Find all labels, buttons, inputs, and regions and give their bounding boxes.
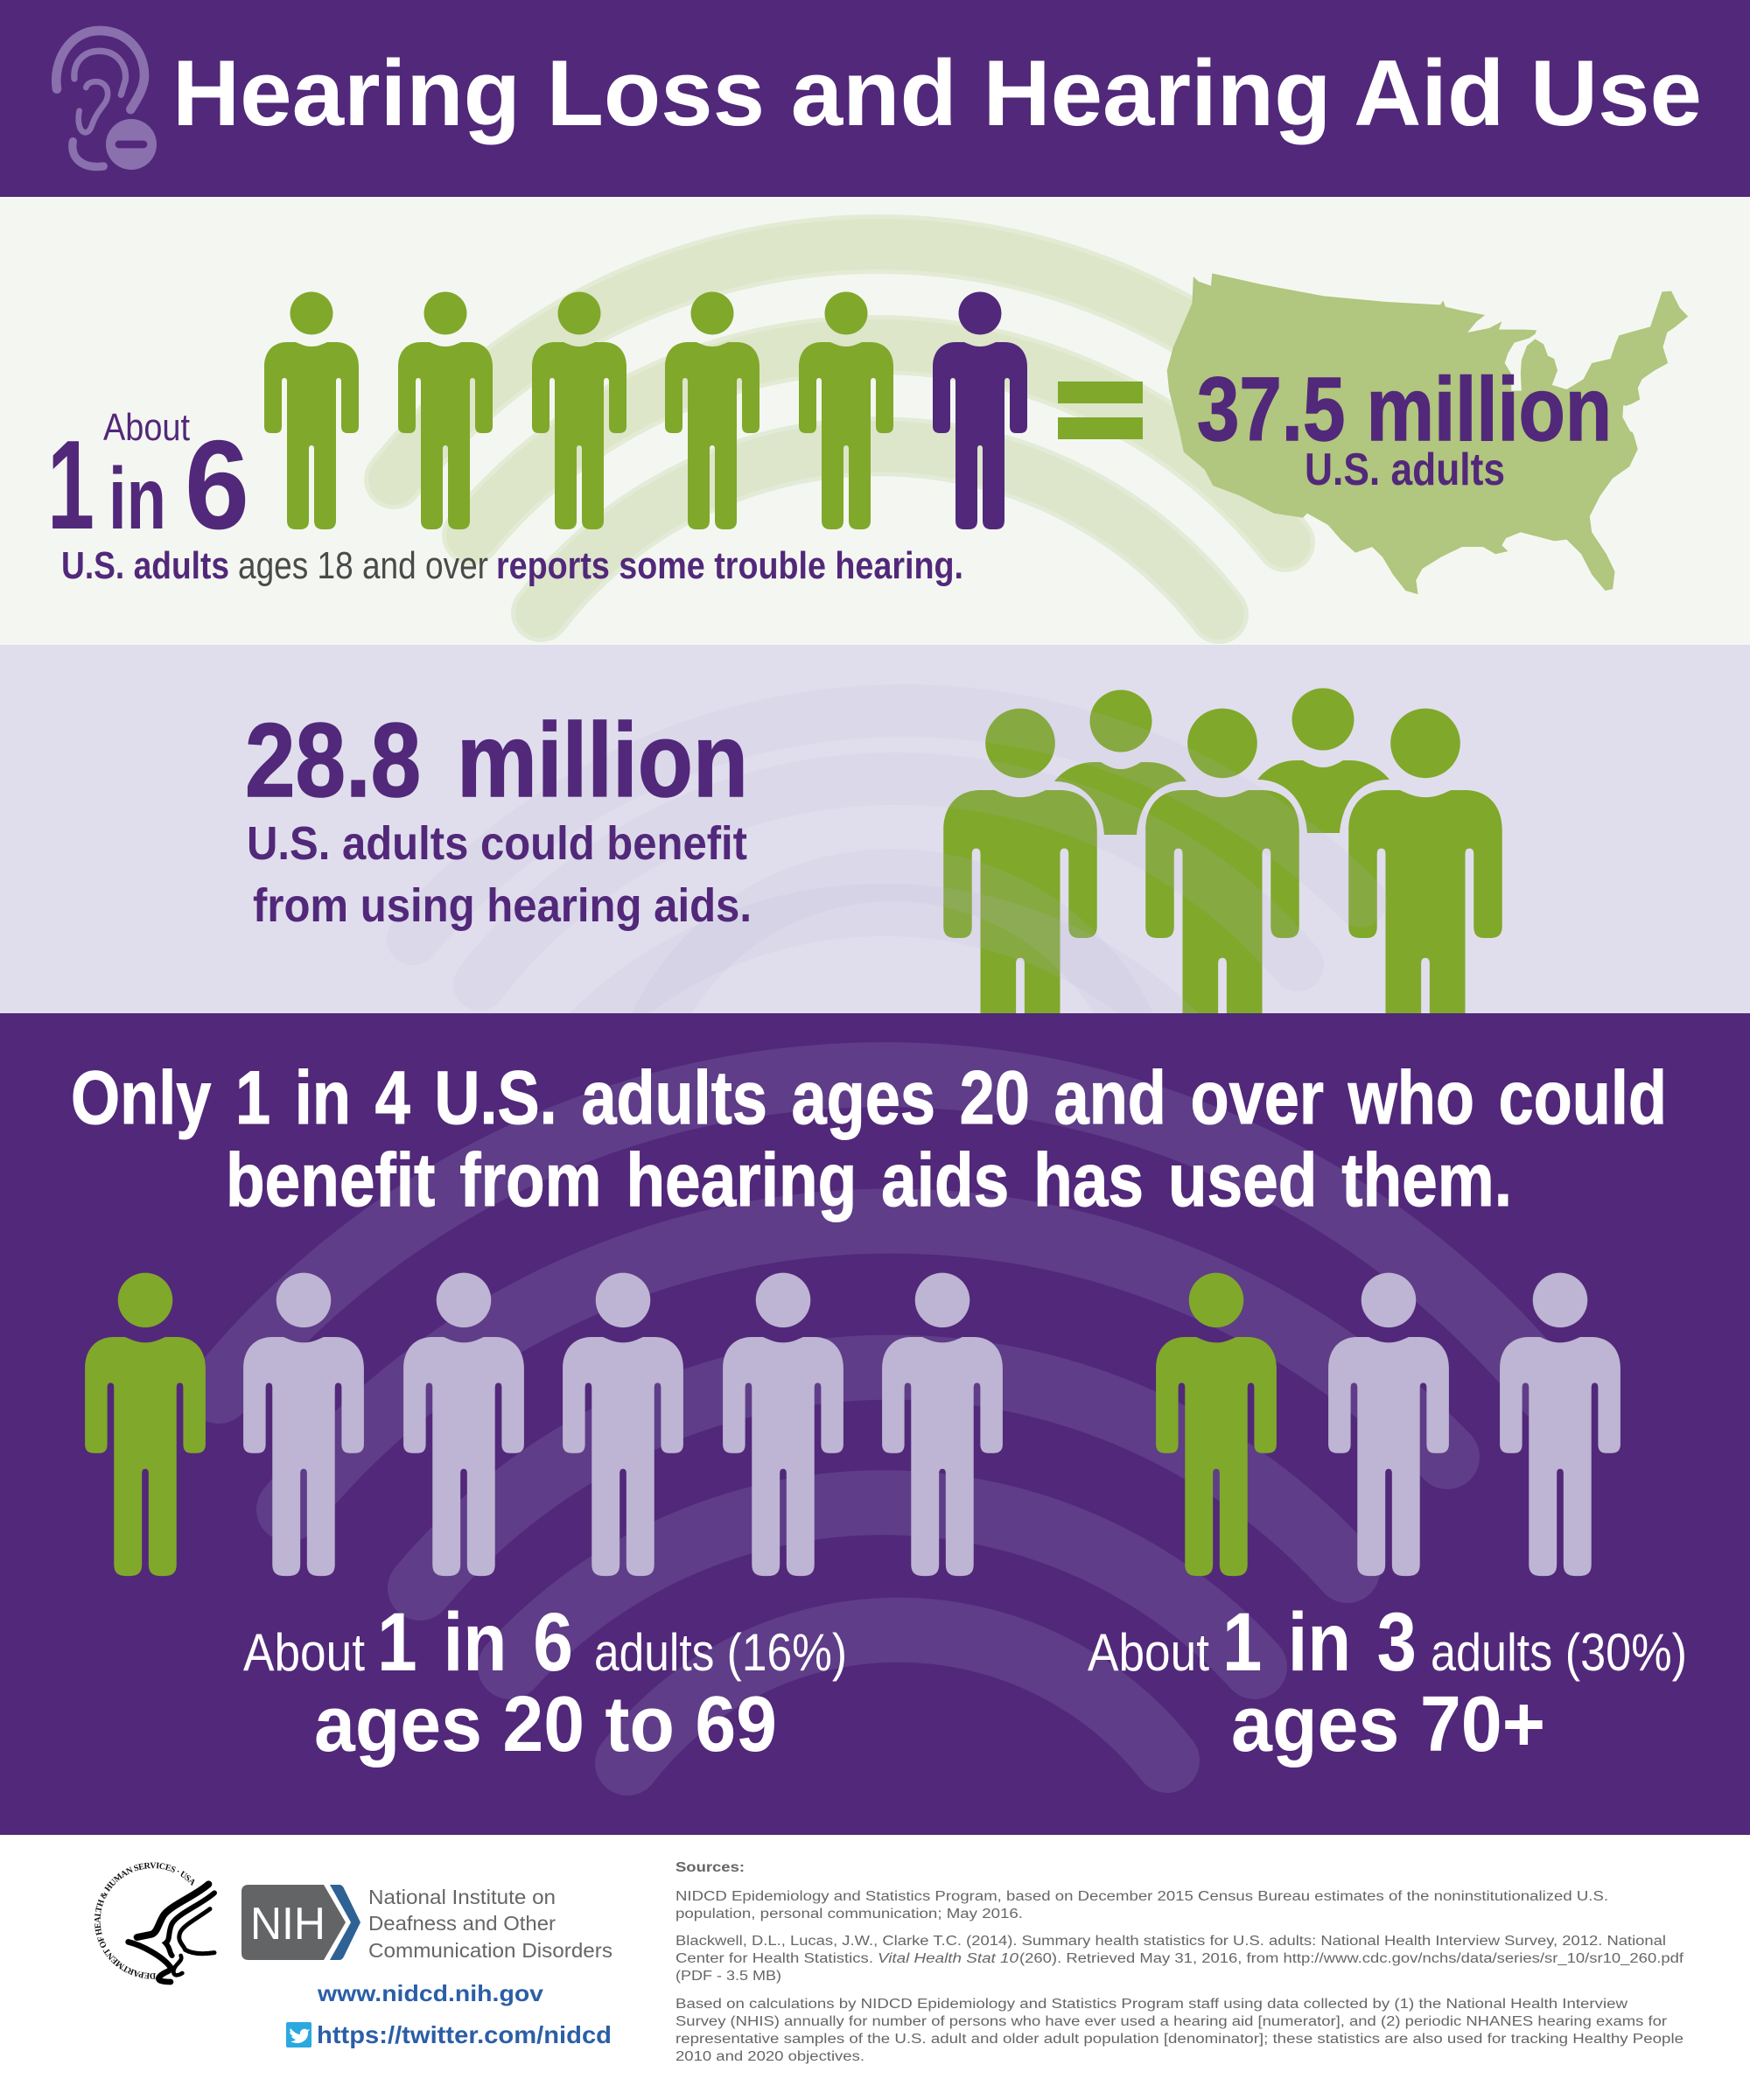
text: could benefit from hearing aids: U.S. adults could benefit	[247, 817, 747, 870]
figure row: five green and one purple person	[264, 292, 1027, 529]
caption: U.S. adults trouble hearing: ages 18 and over	[238, 544, 488, 587]
logo: NIH: NIH	[250, 1899, 326, 1950]
panel: 28.8 million	[0, 645, 1750, 1013]
title: Hearing Loss and Hearing Aid Use	[172, 40, 1702, 145]
twitter link: https://twitter.com/nidcd	[317, 2021, 612, 2048]
text: could benefit from hearing aids	[247, 817, 752, 932]
statistic: 28.8 million: 28.8 million	[245, 702, 748, 819]
sources text: Based on calculations by NIDCD Epidemiology and Statistics Program staff using data collected by (1) the National Health Interview	[676, 1997, 1628, 2012]
website link: www.nidcd.nih.gov	[317, 1980, 544, 2006]
group of five green figures	[943, 688, 1502, 1095]
sources text: (260). Retrieved May 31, 2016, from http://www.cdc.gov/nchs/data/series/sr_10/sr10_260.pdf	[1019, 1951, 1684, 1966]
text: institute name: Communication Disorders	[368, 1939, 612, 1962]
heading	[71, 1056, 1667, 1222]
heading: benefit from hearing aids has used them.	[226, 1138, 1512, 1222]
icon: equals sign	[1058, 382, 1143, 439]
panel: only 1 in 4	[0, 1013, 1750, 1835]
sources text: Sources:	[676, 1860, 745, 1875]
text: could benefit from hearing aids: from using hearing aids.	[253, 879, 752, 932]
sources text: 2010 and 2020 objectives.	[676, 2049, 864, 2064]
figure row: 1 in 3 adults	[1156, 1273, 1620, 1576]
statistic: about 1 in 6 ages 20 to 69: 1 in 6	[377, 1596, 573, 1689]
footer logos and links	[94, 1862, 612, 2048]
statistic: about 1 in 6	[47, 406, 249, 556]
statistic: about 1 in 3 ages 70+: adults (30%)	[1431, 1623, 1687, 1682]
sources text: representative samples of the U.S. adult and older adult population [denominator]; these statistics are also used for tracking Healthy People	[676, 2032, 1684, 2047]
sources text: Vital Health Stat 10	[878, 1951, 1018, 1966]
statistic: about 1 in 3 ages 70+: ages 70+	[1231, 1681, 1545, 1768]
statistic: about 1 in 6: 6	[185, 414, 249, 556]
statistic: about 1 in 3 ages 70+: 1 in 3	[1222, 1596, 1417, 1689]
statistic: about 1 in 6 ages 20 to 69	[243, 1596, 847, 1768]
logo: NIH	[242, 1885, 360, 1960]
statistic: about 1 in 6: About	[103, 406, 190, 449]
panel: 1 in 6 adults	[0, 197, 1750, 645]
sources text: Survey (NHIS) annually for number of persons who have ever used a hearing aid [numerator], and (2) periodic NHANES hearing exams for	[676, 2014, 1667, 2029]
statistic: about 1 in 6 ages 20 to 69: About	[243, 1623, 365, 1682]
figure row: 1 in 6 adults	[85, 1273, 1003, 1576]
text: institute name: National Institute on	[368, 1886, 556, 1908]
background sound arcs	[632, 709, 1387, 1013]
statistic: 37.5 million U.S. adults: 37.5 million	[1197, 359, 1612, 459]
statistic: about 1 in 6: 1	[47, 414, 94, 556]
caption: U.S. adults trouble hearing: reports some trouble hearing.	[496, 544, 963, 587]
statistic: about 1 in 6: in	[108, 450, 166, 548]
sources text: (PDF - 3.5 MB)	[676, 1969, 781, 1984]
background sound arcs	[219, 1074, 1549, 1763]
statistic: about 1 in 6 ages 20 to 69: adults (16%)	[594, 1623, 847, 1682]
icon: ear with minus sign	[56, 31, 157, 170]
sources text: Blackwell, D.L., Lucas, J.W., Clarke T.C. (2014). Summary health statistics for U.S. adults: National Health Interview Survey, 2012. National	[676, 1934, 1666, 1949]
icon: twitter	[286, 2022, 312, 2048]
statistic: about 1 in 3 ages 70+: About	[1088, 1623, 1209, 1682]
sources text: population, personal communication; May 2016.	[676, 1907, 1023, 1922]
logo: HHS eagle seal: DEPARTMENT OF HEALTH & HUMAN SERVICES · USA	[94, 1862, 194, 1979]
caption: U.S. adults trouble hearing: U.S. adults	[61, 544, 229, 587]
text: institute name: Deafness and Other	[368, 1912, 556, 1935]
text: institute name	[368, 1886, 612, 1962]
sources text	[676, 1860, 1684, 2064]
sources text: NIDCD Epidemiology and Statistics Program, based on December 2015 Census Bureau estimates of the noninstitutionalized U.S.	[676, 1889, 1608, 1904]
statistic: about 1 in 3 ages 70+	[1088, 1596, 1687, 1768]
statistic: 37.5 million U.S. adults	[1197, 359, 1612, 495]
background sound arcs	[394, 244, 1363, 614]
statistic: 37.5 million U.S. adults: U.S. adults	[1305, 444, 1505, 495]
panel: header	[0, 0, 1750, 197]
sources text: Center for Health Statistics.	[676, 1951, 873, 1966]
statistic: about 1 in 6 ages 20 to 69: ages 20 to 69	[314, 1681, 777, 1768]
map of the United States	[1167, 273, 1688, 594]
caption: U.S. adults trouble hearing	[61, 544, 963, 587]
